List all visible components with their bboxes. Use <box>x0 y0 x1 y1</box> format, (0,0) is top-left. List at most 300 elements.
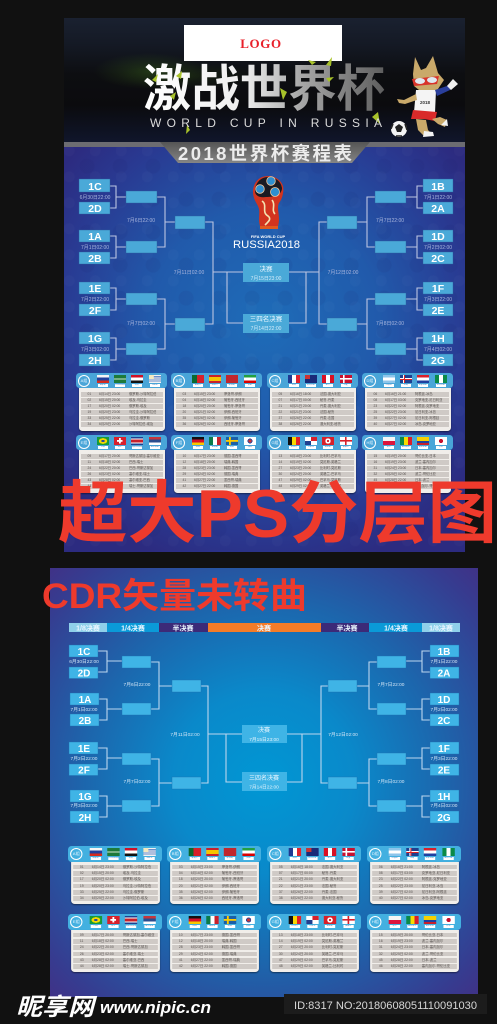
group G: poster 1 <box>267 435 358 495</box>
mascot: wolf Zabivaka with ball: 2018 <box>420 100 431 105</box>
group G: poster 1: 6月29日 02:00 <box>290 484 311 488</box>
group A: poster 1: A组 <box>81 378 87 382</box>
group D: poster 1: 6月22日 02:00 <box>385 404 406 408</box>
group H: poster 1: 日本-波兰 <box>415 478 429 482</box>
group E: poster 2: 6月22日 20:00 <box>92 945 114 949</box>
match dates: poster 2: 7月7日22:00 <box>378 682 405 688</box>
group D: poster 2: 6月27日 02:00 <box>391 896 413 900</box>
group C: poster 1: 6月17日 00:00 <box>290 398 311 402</box>
round tabs: poster 2: 1/4决赛 <box>121 624 145 632</box>
match dates: poster 2: 7月2日22:00 <box>71 756 98 762</box>
group F: poster 2: 6月27日 22:00 <box>191 964 213 968</box>
third place box: poster 1 <box>243 314 289 333</box>
group F: poster 1: 41 <box>182 478 186 482</box>
group B: poster 1: 摩洛哥 <box>229 384 235 386</box>
group G: poster 2: 47 <box>279 958 283 962</box>
group F: poster 1: 韩国-德国 <box>224 484 238 488</box>
group A: poster 2: 6月20日 02:00 <box>92 877 114 881</box>
match dates: poster 1: 7月1日02:00 <box>81 245 109 251</box>
group D: poster 2: 阿根廷-克罗地亚 <box>422 877 447 881</box>
group B: poster 2: 伊朗-西班牙 <box>222 884 240 888</box>
group H: poster 2: 日本 <box>446 925 450 927</box>
group C: poster 2: 法国-澳大利亚 <box>322 865 343 869</box>
group G: poster 2: 巴拿马 <box>309 925 315 927</box>
group F: poster 2: 韩国-墨西哥 <box>222 945 240 949</box>
group H: poster 1: 波兰-塞内加尔 <box>415 460 436 464</box>
team labels: poster 1: 1G <box>88 333 102 345</box>
group C: poster 2: 澳大利亚-秘鲁 <box>322 896 343 900</box>
team labels: poster 1: 1D <box>431 231 445 243</box>
group D: poster 1: 尼日利亚 <box>437 384 445 386</box>
group F: poster 2: 42 <box>179 964 183 968</box>
group F: poster 1: 德国 <box>196 446 200 448</box>
group H: poster 1: 46 <box>374 484 377 488</box>
group H: poster 1: 16 <box>374 460 377 464</box>
group E: poster 1: 巴西 <box>101 446 105 448</box>
team labels: poster 2: 2B <box>79 716 91 727</box>
group B: poster 1: 04 <box>182 398 186 402</box>
third place box: poster 2: 7月14日22:00 <box>249 784 279 790</box>
group C: poster 1: 07 <box>278 398 282 402</box>
group B: poster 2: 6月26日 02:00 <box>191 890 213 894</box>
match dates: poster 2: 7月2日02:00 <box>431 707 458 713</box>
group C: poster 2: 澳大利亚 <box>308 857 316 859</box>
group C: poster 2: 丹麦 <box>346 857 350 859</box>
group H: poster 2: 日本-波兰 <box>422 958 437 962</box>
group H: poster 1: 日本 <box>439 446 443 448</box>
group F: poster 1: 6月27日 22:00 <box>194 484 215 488</box>
group H: poster 2: 塞内加尔-哥伦比亚 <box>422 964 450 968</box>
group B: poster 2: 摩洛哥 <box>227 857 233 859</box>
group F: poster 2: 墨西哥 <box>209 925 215 927</box>
group A: poster 1: 6月20日 23:00 <box>99 410 120 414</box>
group H: poster 2: 波兰 <box>393 925 397 927</box>
group E: poster 1: 巴西-哥斯达黎加 <box>129 466 153 470</box>
final box: poster 2: 7月15日23:00 <box>249 737 279 743</box>
group F: poster 1: 6月23日 23:00 <box>194 466 215 470</box>
group A: poster 2: 6月25日 22:00 <box>92 896 114 900</box>
watermark: nipic logo and url: www.nipic.cn <box>100 998 211 1017</box>
group F: poster 1: 6月18日 20:00 <box>194 460 215 464</box>
group G: poster 1: 27 <box>278 466 282 470</box>
group G: poster 2: 6月18日 23:00 <box>291 933 313 937</box>
group G: poster 1: 英格兰-巴拿马 <box>320 472 341 476</box>
group D: poster 1: 6月17日 03:00 <box>385 398 406 402</box>
group E: poster 2: 塞尔维亚 <box>145 925 153 927</box>
group D: poster 1: 阿根廷 <box>386 384 392 386</box>
match dates: poster 2: 7月1日22:00 <box>431 659 458 665</box>
group F: poster 2: 韩国-德国 <box>222 964 237 968</box>
group H: poster 2: 哥伦比亚 <box>426 925 434 927</box>
group G: poster 2 <box>267 914 361 974</box>
group E: poster 2: 瑞士-哥斯达黎加 <box>123 964 148 968</box>
group D: poster 1: 6月27日 02:00 <box>385 422 406 426</box>
team labels: poster 2: 1D <box>438 695 450 706</box>
group F: poster 2: 28 <box>179 945 183 949</box>
group A: poster 1: 33 <box>88 416 91 420</box>
group H: poster 2: 波兰-塞内加尔 <box>422 939 443 943</box>
group F: poster 1: 6月24日 02:00 <box>194 472 215 476</box>
group B: poster 1: 36 <box>182 422 186 426</box>
group A: poster 2: 埃及 <box>129 857 133 859</box>
group B: poster 1: 35 <box>182 416 186 420</box>
group A: poster 1: 34 <box>88 422 91 426</box>
group H: poster 2: H组 <box>372 918 379 924</box>
final box: poster 1: 7月15日23:00 <box>251 276 282 282</box>
group G: poster 2: 6月29日 02:00 <box>291 958 313 962</box>
group E: poster 1: 6月17日 20:00 <box>99 454 120 458</box>
group E: poster 1: 43 <box>88 478 91 482</box>
group A: poster 1: 俄罗斯 <box>100 384 106 386</box>
group E: poster 2: E组 <box>73 918 80 924</box>
group A: poster 1: 埃及 <box>135 384 139 386</box>
group D: poster 1: 6月16日 21:00 <box>385 392 406 396</box>
group D: poster 2: 23 <box>379 877 383 881</box>
group A: poster 2: 6月14日 23:00 <box>92 865 114 869</box>
group G: poster 1: 47 <box>278 478 282 482</box>
ribbon with schedule heading: 2018世界杯赛程表 <box>178 143 352 164</box>
group A: poster 1: 6月15日 20:00 <box>99 398 120 402</box>
group C: poster 2 <box>267 846 361 906</box>
group E: poster 2: 6月18日 02:00 <box>92 939 114 943</box>
round tabs: poster 2: 决赛 <box>257 624 271 632</box>
group B: poster 2: 葡萄牙 <box>192 857 198 859</box>
match dates: poster 1: 7月2日02:00 <box>424 245 452 251</box>
group G: poster 1: 6月23日 20:00 <box>290 466 311 470</box>
group F: poster 1: 德国-墨西哥 <box>224 454 242 458</box>
group B: poster 2: 西班牙 <box>209 857 215 859</box>
group D: poster 1: 25 <box>374 410 377 414</box>
group A: poster 1: 俄罗斯-沙特阿拉伯 <box>129 392 156 396</box>
group D: poster 1: 冰岛 <box>404 384 408 386</box>
group G: poster 1: 比利时-巴拿马 <box>320 454 341 458</box>
group D: poster 2: 尼日利亚-冰岛 <box>422 884 443 888</box>
group G: poster 1: 巴拿马 <box>308 446 314 448</box>
group F: poster 2: 瑞典-韩国 <box>222 939 237 943</box>
match dates: poster 1: 7月1日22:00 <box>424 195 452 201</box>
group B: poster 1: 6月15日 23:00 <box>194 392 215 396</box>
group E: poster 1: 塞尔维亚-巴西 <box>129 478 150 482</box>
group A: poster 1: 6月14日 23:00 <box>99 392 120 396</box>
group B: poster 1: 西班牙 <box>212 384 218 386</box>
group E: poster 2: 塞尔维亚-瑞士 <box>123 952 144 956</box>
group E: poster 2: 哥斯达黎加-塞尔维亚 <box>123 933 155 937</box>
group G: poster 1: 30 <box>278 472 282 476</box>
group F: poster 1: 墨西哥-瑞典 <box>224 478 242 482</box>
group D: poster 1: 08 <box>374 398 377 402</box>
group D: poster 2: 阿根廷-冰岛 <box>422 865 440 869</box>
group C: poster 1: 秘鲁 <box>326 384 330 386</box>
group D: poster 2: 6月17日 03:00 <box>391 871 413 875</box>
match dates: poster 1: 7月2日22:00 <box>81 297 109 303</box>
group F: poster 1: 12 <box>182 460 186 464</box>
group F: poster 2: 10 <box>179 933 183 937</box>
group B: poster 1: 20 <box>182 410 186 414</box>
group C: poster 1: 6月26日 22:00 <box>290 416 311 420</box>
group B: poster 1: 伊朗 <box>248 384 252 386</box>
group A: poster 1: 埃及-乌拉圭 <box>129 398 147 402</box>
group H: poster 1: 6月28日 22:00 <box>385 484 406 488</box>
group A: poster 1: 01 <box>88 392 91 396</box>
group F: poster 2: 29 <box>179 952 183 956</box>
group E: poster 1: 6月23日 02:00 <box>99 472 120 476</box>
group D: poster 2: 40 <box>379 896 383 900</box>
group F: poster 2: F组 <box>172 918 179 924</box>
match dates: poster 2: 7月6日22:00 <box>124 682 151 688</box>
group A: poster 2: 俄罗斯-埃及 <box>123 877 141 881</box>
group E: poster 1: 6月28日 02:00 <box>99 478 120 482</box>
group D: poster 1: D组 <box>367 378 373 382</box>
group H: poster 1 <box>362 435 453 495</box>
team labels: poster 2: 1A <box>79 695 91 706</box>
round tabs: poster 2 <box>69 623 460 632</box>
group F: poster 1: 10 <box>182 454 186 458</box>
group C: poster 2: C组 <box>272 850 279 856</box>
group C: poster 2: 6月21日 20:00 <box>291 877 313 881</box>
group E: poster 1: 6月22日 20:00 <box>99 466 120 470</box>
match dates: poster 2 <box>69 659 458 809</box>
group F: poster 1: 德国-瑞典 <box>224 472 238 476</box>
group A: poster 1: 17 <box>88 404 91 408</box>
group D: poster 1: 阿根廷-冰岛 <box>415 392 433 396</box>
group B: poster 1 <box>171 373 262 433</box>
group D: poster 2: 06 <box>379 865 383 869</box>
group H: poster 2: 45 <box>379 958 383 962</box>
group A: poster 2 <box>68 846 162 906</box>
group H: poster 1: 波兰-哥伦比亚 <box>415 472 436 476</box>
team labels: poster 2: 2A <box>438 668 450 680</box>
group E: poster 1: 26 <box>88 472 91 476</box>
group B: poster 2: 35 <box>179 890 183 894</box>
group G: poster 2: 6月19日 02:00 <box>291 939 313 943</box>
group G: poster 1: 6月19日 02:00 <box>290 460 311 464</box>
big red caption: PS layered file: 超大PS分层图 <box>58 476 497 552</box>
group D: poster 1: 6月27日 02:00 <box>385 416 406 420</box>
group F: poster 2: 墨西哥-瑞典 <box>222 958 240 962</box>
group G: poster 2: 英格兰-巴拿马 <box>322 952 343 956</box>
group H: poster 2 <box>367 914 461 974</box>
group B: poster 1: 18 <box>182 404 186 408</box>
match dates: poster 1: 6月30日22:00 <box>80 195 111 201</box>
group H: poster 2: 6月19日 20:00 <box>391 933 413 937</box>
group A: poster 1: 02 <box>88 398 91 402</box>
match dates: poster 1: 7月7日22:00 <box>376 218 404 224</box>
group H: poster 1: 哥伦比亚-日本 <box>415 454 436 458</box>
team labels: poster 1: 1A <box>88 231 102 243</box>
group F: poster 2: 6月27日 22:00 <box>191 958 213 962</box>
match dates: poster 1 <box>80 195 452 353</box>
group D: poster 1: 40 <box>374 422 377 426</box>
watermark: nipic logo and url <box>16 994 211 1021</box>
group G: poster 2: 比利时-突尼斯 <box>322 945 343 949</box>
third place box: poster 1: 三四名决赛 <box>250 314 283 323</box>
group G: poster 2: 比利时-巴拿马 <box>322 933 343 937</box>
group B: poster 1: 6月26日 02:00 <box>194 416 215 420</box>
group B: poster 2: 葡萄牙-摩洛哥 <box>222 877 243 881</box>
group B: poster 2: 03 <box>179 865 183 869</box>
match dates: poster 1: 7月4日02:00 <box>424 347 452 353</box>
logo box <box>184 25 342 61</box>
group C: poster 2: 07 <box>279 871 283 875</box>
team labels: poster 2: 2H <box>79 813 91 824</box>
group C: poster 2: 22 <box>279 884 283 888</box>
group G: poster 2: 13 <box>279 933 283 937</box>
group E: poster 1 <box>76 435 167 495</box>
group G: poster 1: 比利时-突尼斯 <box>320 466 341 470</box>
group G: poster 2: 英格兰 <box>345 925 351 927</box>
group D: poster 1: 尼日利亚-冰岛 <box>415 410 436 414</box>
group H: poster 2: 哥伦比亚-日本 <box>422 933 443 937</box>
group G: poster 2: 突尼斯-英格兰 <box>322 939 343 943</box>
group F: poster 2: 6月17日 23:00 <box>191 933 213 937</box>
group C: poster 2: 法国-秘鲁 <box>322 884 337 888</box>
match dates: poster 2: 7月8日02:00 <box>378 779 405 785</box>
group B: poster 1: 葡萄牙-摩洛哥 <box>224 404 245 408</box>
group D: poster 1: 冰岛-克罗地亚 <box>415 422 436 426</box>
round tabs: poster 2: 1/8决赛 <box>429 624 453 632</box>
group C: poster 2: 6月26日 22:00 <box>291 896 313 900</box>
group E: poster 2: 瑞士 <box>111 925 115 927</box>
match dates: poster 2: 7月1日02:00 <box>71 707 98 713</box>
group G: poster 2: 48 <box>279 964 283 968</box>
team labels: poster 2: 1H <box>438 792 450 803</box>
group C: poster 2: 05 <box>279 865 283 869</box>
group H: poster 1: 哥伦比亚 <box>419 446 427 448</box>
team labels: poster 1: 2H <box>88 355 102 367</box>
group F: poster 1: 瑞典-韩国 <box>224 460 238 464</box>
group E: poster 2: 6月17日 20:00 <box>92 933 114 937</box>
group A: poster 2: 乌拉圭 <box>146 857 152 859</box>
confetti <box>152 57 380 134</box>
group G: poster 2: 英格兰-比利时 <box>322 964 343 968</box>
round tabs: poster 2: 半决赛 <box>172 624 194 632</box>
group A: poster 2: 俄罗斯 <box>93 857 99 859</box>
group C: poster 1: 6月21日 23:00 <box>290 410 311 414</box>
FIFA trophy logo <box>233 176 300 251</box>
group B: poster 2: 04 <box>179 871 183 875</box>
group H: poster 1: H组 <box>367 440 373 444</box>
group C: poster 2: 6月16日 18:00 <box>291 865 313 869</box>
group E: poster 2 <box>68 914 162 974</box>
group E: poster 2: 巴西-瑞士 <box>123 939 138 943</box>
group B: poster 1: 6月26日 02:00 <box>194 422 215 426</box>
team labels: poster 2: 2C <box>438 716 450 727</box>
group E: poster 1: 6月28日 02:00 <box>99 484 120 488</box>
group E: poster 1: 塞尔维亚 <box>151 446 159 448</box>
group D: poster 1: 克罗地亚 <box>419 384 427 386</box>
match dates: poster 1: 7月3日02:00 <box>81 347 109 353</box>
group F: poster 2: 6月23日 23:00 <box>191 945 213 949</box>
team labels: poster 1: 1E <box>89 283 101 295</box>
group D: poster 2: 6月22日 02:00 <box>391 877 413 881</box>
group B: poster 1: 葡萄牙 <box>195 384 201 386</box>
mascot: wolf Zabivaka with ball <box>391 56 458 137</box>
group B: poster 1: 西班牙-摩洛哥 <box>224 422 245 426</box>
group C: poster 2: 6月21日 23:00 <box>291 884 313 888</box>
group G: poster 2: 6月24日 20:00 <box>291 952 313 956</box>
group H: poster 2: 6月19日 23:00 <box>391 939 413 943</box>
poster background: CDR version <box>50 568 478 997</box>
group C: poster 1: 澳大利亚-秘鲁 <box>320 422 341 426</box>
group H: poster 2: 15 <box>379 933 383 937</box>
group E: poster 2: 巴西 <box>94 925 98 927</box>
team labels: poster 2: 1B <box>438 647 450 658</box>
title: 激战世界杯 <box>143 61 385 117</box>
group E: poster 2: 26 <box>80 952 84 956</box>
group G: poster 1: 突尼斯 <box>325 446 331 448</box>
group A: poster 1: 乌拉圭 <box>152 384 158 386</box>
group A: poster 2: 6月15日 20:00 <box>92 871 114 875</box>
group B: poster 1: 6月16日 02:00 <box>194 398 215 402</box>
group D: poster 1: 6月22日 23:00 <box>385 410 406 414</box>
logo wordmark: FIFA WORLD CUP <box>251 234 285 239</box>
group H: poster 1: 6月19日 20:00 <box>385 454 406 458</box>
group B: poster 2 <box>167 846 261 906</box>
group F: poster 2: 12 <box>179 939 183 943</box>
team labels: poster 1: 1H <box>431 333 445 345</box>
group B: poster 1: 伊朗-葡萄牙 <box>224 416 242 420</box>
group B: poster 1: 03 <box>182 392 186 396</box>
group G: poster 2: 27 <box>279 945 283 949</box>
group F: poster 1 <box>171 435 262 495</box>
team labels: poster 2: 2D <box>78 668 90 680</box>
group B: poster 2: 伊朗-葡萄牙 <box>222 890 240 894</box>
group G: poster 2: 6月23日 20:00 <box>291 945 313 949</box>
group B: poster 2: 6月16日 02:00 <box>191 871 213 875</box>
group C: poster 1 <box>267 373 358 433</box>
group E: poster 2: 09 <box>80 933 84 937</box>
group C: poster 2: 法国 <box>293 857 297 859</box>
subtitle: WORLD CUP IN RUSSIA: WORLD CUP IN RUSSIA <box>150 116 382 130</box>
match dates: poster 1: 7月12日02:00 <box>328 270 359 276</box>
group D: poster 2: 尼日利亚-阿根廷 <box>422 890 447 894</box>
group B: poster 2: 葡萄牙-西班牙 <box>222 871 243 875</box>
group H: poster 1: 6月25日 02:00 <box>385 472 406 476</box>
team labels: poster 1: 2B <box>88 253 102 265</box>
group D: poster 2: D组 <box>372 850 379 856</box>
watermark: nipic logo and url: 昵享网 <box>16 994 97 1021</box>
group F: poster 2 <box>167 914 261 974</box>
team labels: poster 2: 1C <box>78 647 90 658</box>
group E: poster 1: E组 <box>81 440 87 444</box>
match dates: poster 2: 7月12日02:00 <box>328 732 358 738</box>
group F: poster 2: 德国-墨西哥 <box>222 933 240 937</box>
group B: poster 2: 西班牙-摩洛哥 <box>222 896 243 900</box>
bracket lines: poster 2 <box>98 651 430 817</box>
group H: poster 2: 塞内加尔 <box>408 925 416 927</box>
group E: poster 1: 哥斯达黎加-塞尔维亚 <box>129 454 160 458</box>
group B: poster 1: 葡萄牙-西班牙 <box>224 398 245 402</box>
group A: poster 1: 6月25日 22:00 <box>99 422 120 426</box>
group E: poster 1: 瑞士 <box>118 446 122 448</box>
group C: poster 2: 秘鲁 <box>328 857 332 859</box>
group A: poster 2: 乌拉圭-沙特阿拉伯 <box>123 884 151 888</box>
team labels: poster 1: 1F <box>432 283 445 295</box>
group C: poster 2: 38 <box>279 896 283 900</box>
group D: poster 2 <box>367 846 461 906</box>
team labels: poster 1: 1C <box>88 181 102 193</box>
group A: poster 2: 34 <box>80 896 84 900</box>
team labels: poster 1 <box>88 181 445 367</box>
grey band <box>64 142 465 147</box>
group H: poster 2: 46 <box>379 964 383 968</box>
group D: poster 1: 39 <box>374 416 377 420</box>
group B: poster 2: 20 <box>179 884 183 888</box>
team labels: poster 2: 2E <box>438 766 450 776</box>
team labels: poster 2: 2G <box>437 813 451 824</box>
group B: poster 2: 18 <box>179 877 183 881</box>
team labels: poster 1: 2D <box>88 203 102 215</box>
